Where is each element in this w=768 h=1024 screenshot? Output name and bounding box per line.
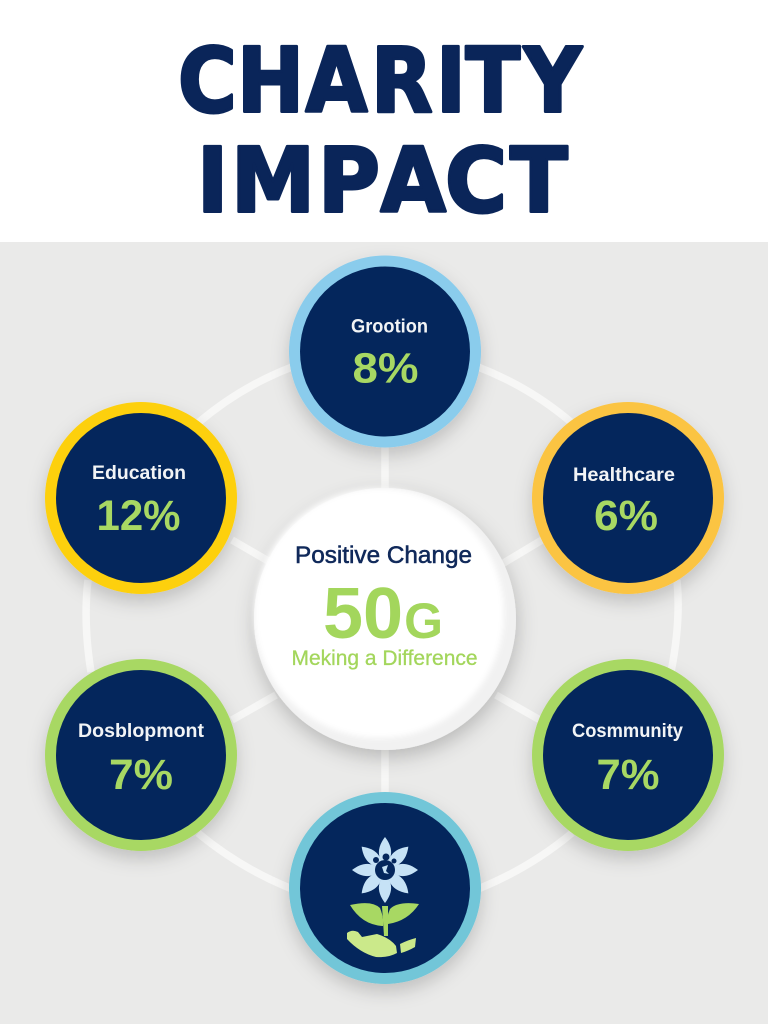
node: Education: Education bbox=[92, 463, 186, 484]
icon: flower bbox=[352, 837, 418, 903]
node: Growth: Grootion bbox=[351, 316, 428, 338]
centre number: 50G bbox=[323, 574, 443, 654]
node: Education: 12% bbox=[96, 492, 180, 540]
title bbox=[178, 28, 583, 233]
title: IMPACT bbox=[197, 129, 568, 233]
centre heading: Positive Change bbox=[295, 542, 472, 569]
node: Development: 7% bbox=[109, 751, 173, 799]
icon: hand bbox=[347, 931, 416, 957]
icon: stem and leaves bbox=[350, 903, 419, 936]
centre circle: Positive Change bbox=[254, 488, 516, 750]
title: CHARITY bbox=[178, 28, 583, 133]
node: Education bbox=[45, 402, 237, 594]
node: Development bbox=[45, 659, 237, 851]
node: Community: Cosmmunity bbox=[572, 721, 683, 742]
node: Community bbox=[532, 659, 724, 851]
node: Growth bbox=[289, 256, 481, 448]
background panel bbox=[0, 242, 768, 1024]
node: Healthcare: 6% bbox=[594, 492, 658, 540]
node: Community: 7% bbox=[596, 751, 660, 799]
node: Growth: 8% bbox=[352, 344, 418, 392]
node: Healthcare: Healthcare bbox=[573, 465, 675, 486]
node: Development: Dosblopmont bbox=[78, 721, 205, 742]
node: flower in hand icon bbox=[289, 792, 481, 984]
node: Healthcare bbox=[532, 402, 724, 594]
connector ring and spokes bbox=[86, 367, 678, 889]
centre subheading: Meking a Difference bbox=[292, 647, 478, 670]
